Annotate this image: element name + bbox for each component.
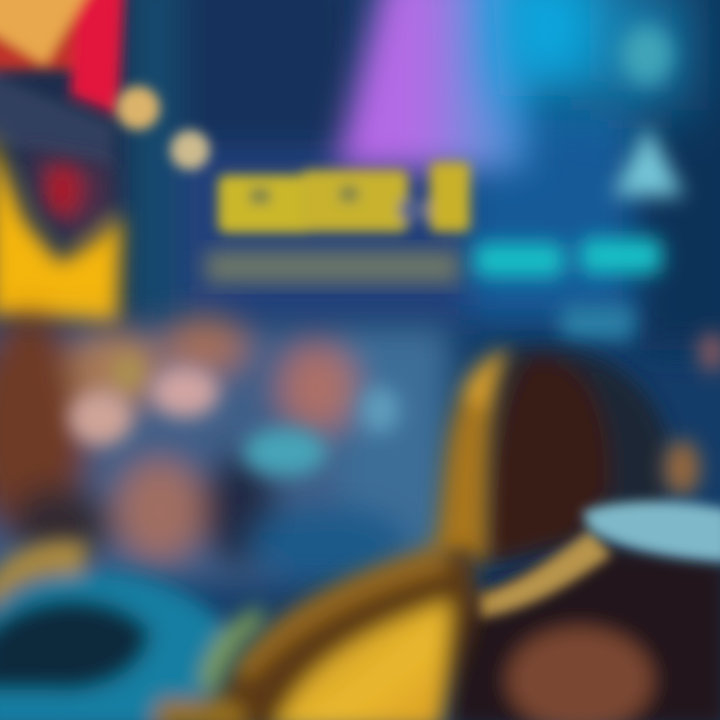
spotlight: purple	[335, 0, 530, 170]
crowd	[0, 315, 450, 585]
foreground figure: gold edge	[430, 348, 700, 560]
lights	[116, 86, 210, 170]
stage backdrop	[0, 0, 720, 350]
banner: red and yellow top left	[0, 0, 125, 170]
pale light shapes	[612, 25, 684, 196]
flame sign	[0, 130, 122, 325]
spotlight: cyan	[490, 0, 690, 110]
foreground: gold garment	[205, 545, 480, 720]
blurred heading: yellow	[218, 162, 470, 233]
blurred subheading: cyan	[474, 238, 662, 340]
foreground: tan collar	[475, 530, 612, 618]
foreground figure: pale blue hat	[582, 501, 720, 562]
foreground figure: head	[470, 347, 668, 565]
blurred subheading: olive	[205, 250, 460, 284]
foreground: teal shoulder	[0, 539, 262, 720]
crowd highlights	[68, 332, 720, 476]
foreground: dark lower right	[450, 540, 720, 720]
